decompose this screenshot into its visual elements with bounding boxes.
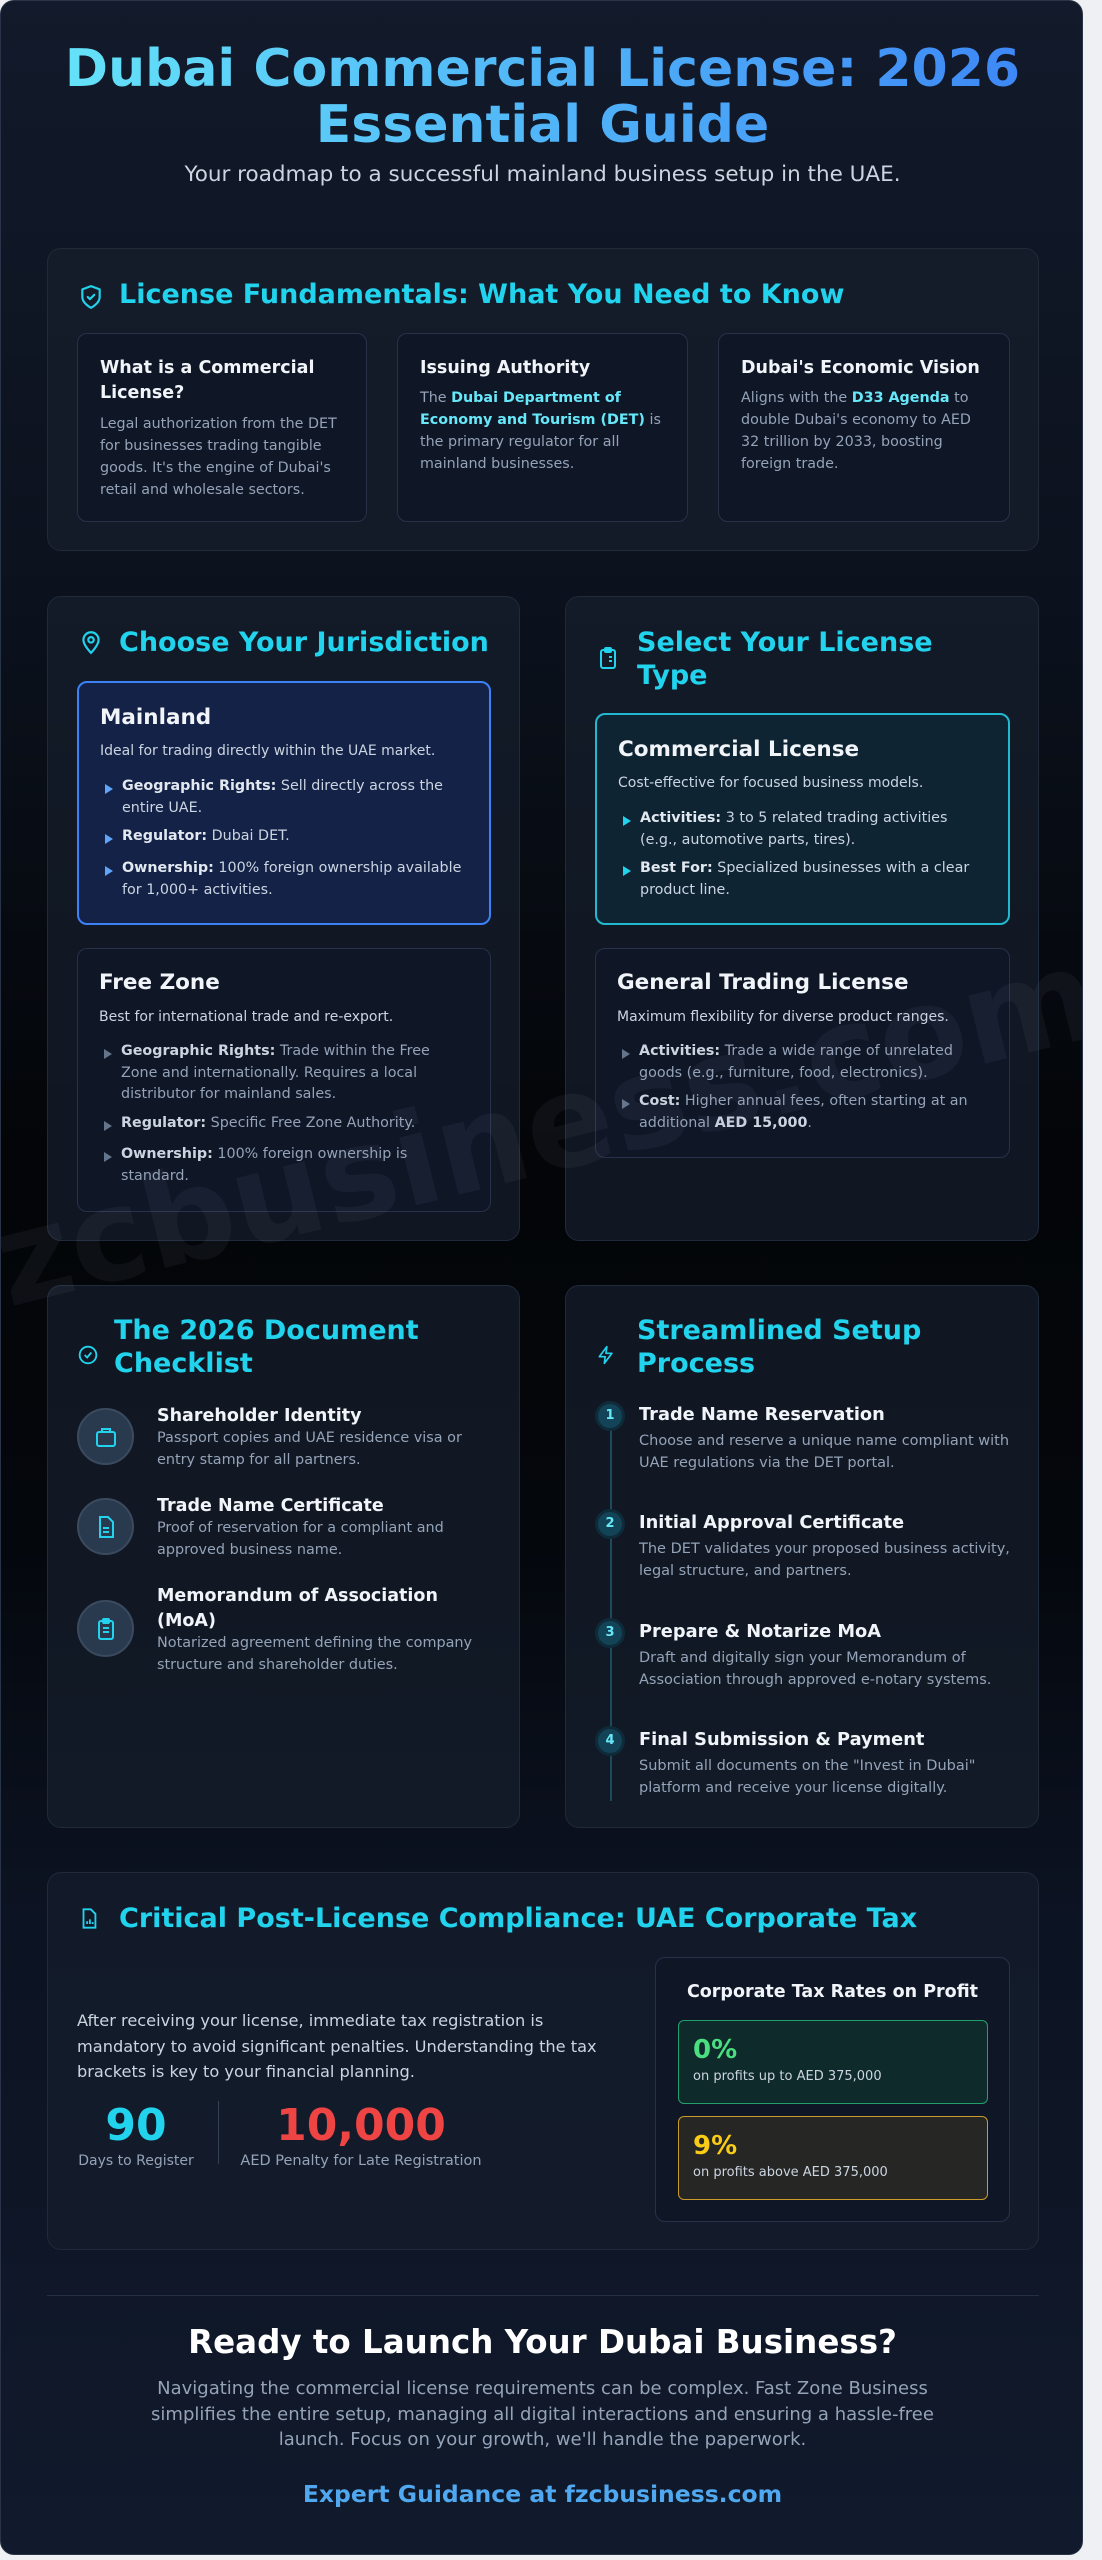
item: shareholder identity: Passport copies and UAE residence visa or: [157, 1430, 462, 1446]
rate: 0%: [678, 2020, 988, 2104]
card: general trading: General Trading License: [617, 970, 909, 995]
heading: Checklist: [114, 1348, 253, 1379]
card: economic vision: Aligns with the D33 Agenda to: [741, 390, 968, 406]
timeline line: [610, 1416, 612, 1801]
card: general trading: goods (e.g., furniture, food, electronics).: [639, 1064, 928, 1080]
heading: Select Your License: [637, 627, 933, 658]
CTA text: simplifies the entire setup, managing all digital interactions and ensuring a hassle-free: [151, 2404, 934, 2424]
panel: license type: [565, 596, 1039, 1241]
icon: map pin: [82, 631, 100, 654]
card: free zone: Ownership: 100% foreign ownership is: [121, 1146, 407, 1162]
card: mainland: Ownership: 100% foreign ownership available: [122, 860, 461, 876]
heading: License Fundamentals: What You Need to Know: [119, 279, 844, 310]
card: commercial license: Activities: 3 to 5 related trading activities: [640, 810, 947, 826]
icon: report: [82, 1908, 96, 1929]
card: mainland: [77, 681, 491, 925]
step 3: 3: [605, 1625, 615, 1640]
card: commercial license: Best For: Specialized businesses with a clear: [640, 860, 969, 876]
step 4: [595, 1726, 975, 1796]
card: economic vision: 32 trillion by 2033, boosting: [741, 434, 943, 450]
step 2: 2: [605, 1516, 615, 1531]
step 1: Trade Name Reservation: [639, 1404, 885, 1425]
rate: 9%: 9%: [693, 2131, 737, 2161]
panel: setup process: UAE regulations via the DET portal.: [639, 1455, 895, 1471]
item: memorandum: Memorandum of Association: [157, 1586, 438, 1606]
card: what is: retail and wholesale sectors.: [100, 482, 305, 498]
card: economic vision: [718, 333, 1010, 522]
CTA link: Expert Guidance at fzcbusiness.com: [303, 2480, 782, 2508]
panel: setup process: Association through approved e-notary systems.: [639, 1672, 991, 1688]
card: what is: for businesses trading tangible: [100, 438, 322, 454]
card: issuing authority: [397, 333, 688, 522]
icon: check circle: [78, 1346, 98, 1364]
step 2: The DET validates your proposed business activity,: [639, 1541, 1010, 1557]
card: economic vision: double Dubai's economy to AED: [741, 412, 971, 428]
subtitle: Your roadmap to a successful mainland business setup in the UAE.: [184, 162, 901, 187]
card: issuing authority: The Dubai Department of: [420, 390, 621, 406]
item: memorandum: Notarized agreement defining the company: [157, 1635, 472, 1651]
step 4: Submit all documents on the "Invest in Dubai": [639, 1758, 975, 1774]
heading: Choose Your Jurisdiction: [119, 627, 489, 658]
item: memorandum: (MoA): [157, 1611, 216, 1631]
panel: license fundamentals: [47, 248, 1039, 551]
paragraph: mandatory to avoid significant penalties. Understanding the tax: [77, 2036, 597, 2056]
title: Essential Guide: [316, 95, 769, 155]
stat: 90 days: 90: [105, 2100, 167, 2151]
card: what is: What is a Commercial: [100, 358, 314, 378]
item: trade name certificate: Trade Name Certificate: [157, 1496, 384, 1516]
card: general trading: Maximum flexibility for diverse product ranges.: [617, 1009, 949, 1025]
card: mainland: Mainland: [100, 705, 211, 730]
card: mainland: entire UAE.: [122, 800, 202, 816]
item: memorandum: [77, 1586, 472, 1673]
CTA text: launch. Focus on your growth, we'll handle the paperwork.: [279, 2429, 806, 2450]
card: general trading: additional AED 15,000.: [639, 1114, 812, 1130]
card: general trading: Activities: Trade a wide range of unrelated: [639, 1043, 953, 1059]
paragraph: [77, 2011, 597, 2081]
card: mainland: Regulator: Dubai DET.: [122, 828, 290, 844]
heading: [637, 627, 933, 691]
rate: 9%: [678, 2116, 988, 2200]
CTA text: Navigating the commercial license requirements can be complex. Fast Zone Business: [157, 2378, 928, 2399]
card: mainland: Geographic Rights: Sell directly across the: [122, 778, 443, 794]
card: issuing authority: mainland businesses.: [420, 456, 574, 472]
divider: [218, 2101, 219, 2164]
CTA block: [151, 2323, 934, 2508]
card: free zone: distributor for mainland sales.: [121, 1086, 336, 1102]
tax rates box: Corporate Tax Rates on Profit: [687, 1982, 978, 2002]
card: commercial license: product line.: [640, 882, 730, 898]
card: commercial license: (e.g., automotive parts, tires).: [640, 832, 855, 848]
card: what is: License?: [100, 383, 184, 403]
step 1: Choose and reserve a unique name compliant with: [639, 1433, 1009, 1449]
item: trade name certificate: [77, 1496, 444, 1558]
card: commercial license: Commercial License: [618, 737, 859, 762]
card: issuing authority: Economy and Tourism (DET) is: [420, 412, 661, 428]
tax rates box: [655, 1957, 1010, 2222]
card: free zone: Regulator: Specific Free Zone Authority.: [121, 1115, 415, 1131]
CTA heading: Ready to Launch Your Dubai Business?: [188, 2323, 897, 2361]
step 2: Initial Approval Certificate: [639, 1512, 904, 1533]
card: free zone: standard.: [121, 1168, 189, 1184]
item: memorandum: structure and shareholder duties.: [157, 1657, 398, 1673]
card: commercial license: Cost-effective for focused business models.: [618, 775, 923, 791]
heading: Type: [637, 660, 707, 691]
step 2: [595, 1509, 1010, 1579]
stat: 10,000 penalty: 10,000: [276, 2100, 446, 2151]
heading: Critical Post-License Compliance: UAE Corporate Tax: [119, 1903, 917, 1934]
item: trade name certificate: Proof of reservation for a compliant and: [157, 1520, 444, 1536]
card: free zone: Free Zone: [99, 970, 220, 995]
card: what is: [77, 333, 367, 522]
step 4: Final Submission & Payment: [639, 1729, 924, 1750]
card: issuing authority: the primary regulator for all: [420, 434, 619, 450]
icon: clipboard: [600, 647, 616, 669]
card: commercial license: [595, 713, 1010, 925]
icon: shield: [81, 285, 101, 309]
heading: Streamlined Setup: [637, 1315, 921, 1346]
item: shareholder identity: entry stamp for all partners.: [157, 1452, 361, 1468]
rate: 0%: 0%: [693, 2035, 737, 2065]
item: shareholder identity: [77, 1406, 462, 1468]
card: economic vision: Dubai's Economic Vision: [741, 358, 980, 378]
panel: jurisdiction: [47, 596, 520, 1241]
step 3: Prepare & Notarize MoA: [639, 1621, 881, 1642]
card: free zone: Best for international trade and re-export.: [99, 1009, 393, 1025]
heading: [114, 1315, 419, 1379]
card: what is: Legal authorization from the DET: [100, 416, 337, 432]
panel: corporate tax: [47, 1872, 1039, 2250]
card: mainland: Ideal for trading directly within the UAE market.: [100, 743, 435, 759]
card: general trading: Cost: Higher annual fees, often starting at an: [639, 1093, 968, 1109]
card: economic vision: foreign trade.: [741, 456, 838, 472]
step 4: 4: [605, 1733, 615, 1748]
title: Dubai Commercial License: 2026: [65, 39, 1020, 99]
step 1: 1: [605, 1408, 615, 1423]
stat: 90 days: Days to Register: [78, 2153, 194, 2169]
heading: [637, 1315, 921, 1379]
heading: The 2026 Document: [114, 1315, 419, 1346]
step 1: [595, 1401, 1009, 1471]
panel: setup process: platform and receive your license digitally.: [639, 1780, 947, 1796]
card: general trading: [595, 948, 1010, 1158]
rate: 9%: on profits above AED 375,000: [693, 2165, 888, 2180]
card: what is: goods. It's the engine of Dubai's: [100, 460, 331, 476]
icon: lightning: [598, 1346, 613, 1364]
item: trade name certificate: approved business name.: [157, 1542, 342, 1558]
card: free zone: Zone and internationally. Requires a local: [121, 1064, 417, 1080]
paragraph: brackets is key to your financial planning.: [77, 2062, 415, 2081]
panel: document checklist: [47, 1285, 520, 1828]
card: free zone: Geographic Rights: Trade within the Free: [121, 1043, 430, 1059]
card: issuing authority: Issuing Authority: [420, 358, 590, 378]
card: mainland: for 1,000+ activities.: [122, 882, 273, 898]
heading: Process: [637, 1348, 755, 1379]
panel: setup process: [565, 1285, 1039, 1828]
card: free zone: [77, 948, 491, 1212]
panel: setup process: legal structure, and partners.: [639, 1563, 852, 1579]
rate: 0%: on profits up to AED 375,000: [693, 2069, 882, 2084]
step 3: [595, 1618, 991, 1688]
CTA text: [151, 2378, 934, 2450]
stat: 10,000 penalty: AED Penalty for Late Registration: [240, 2153, 482, 2169]
stat: 10,000 penalty: [240, 2100, 482, 2169]
stat: 90 days: [78, 2100, 194, 2169]
step 3: Draft and digitally sign your Memorandum of: [639, 1650, 966, 1666]
title: [1, 41, 1084, 153]
paragraph: After receiving your license, immediate tax registration is: [77, 2011, 543, 2030]
item: shareholder identity: Shareholder Identity: [157, 1406, 361, 1426]
